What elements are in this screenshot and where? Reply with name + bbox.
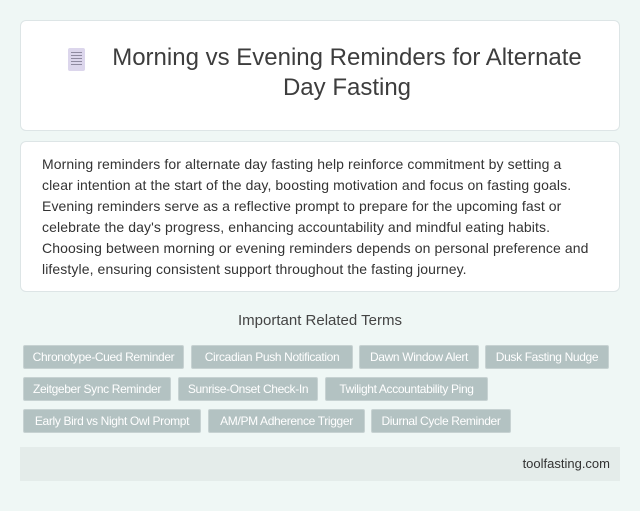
header card bbox=[20, 20, 620, 131]
description text: Choosing between morning or evening reminders depends on personal preference and bbox=[42, 240, 589, 256]
description text: Evening reminders serve as a reflective prompt to prepare for the upcoming fast or bbox=[42, 198, 561, 214]
footer text: toolfasting.com bbox=[523, 456, 610, 471]
description text: lifestyle, ensuring consistent support throughout the fasting journey. bbox=[42, 261, 467, 277]
section heading: Important Related Terms bbox=[238, 312, 402, 329]
description text: Morning reminders for alternate day fasting help reinforce commitment by setting a bbox=[42, 156, 561, 172]
icon: document bbox=[68, 48, 85, 71]
tags: Early Bird vs Night Owl Prompt bbox=[35, 414, 189, 428]
description text: clear intention at the start of the day, boosting motivation and focus on fasting goals. bbox=[42, 177, 571, 193]
tags: Circadian Push Notification bbox=[205, 350, 339, 364]
tags: Diurnal Cycle Reminder bbox=[381, 414, 500, 428]
description text bbox=[42, 156, 589, 277]
tags: AM/PM Adherence Trigger bbox=[220, 414, 353, 428]
tags: Zeitgeber Sync Reminder bbox=[33, 382, 161, 396]
tags: Chronotype-Cued Reminder bbox=[33, 350, 174, 364]
tags: Twilight Accountability Ping bbox=[339, 382, 474, 396]
title: Morning vs Evening Reminders for Alternate Day Fasting bbox=[112, 44, 582, 101]
description text: celebrate the day's progress, enhancing accountability and mindful eating habits. bbox=[42, 219, 550, 235]
tags: Dawn Window Alert bbox=[370, 350, 468, 364]
footer bbox=[20, 447, 620, 481]
tags: Sunrise-Onset Check-In bbox=[188, 382, 308, 396]
description card bbox=[20, 141, 620, 292]
tags: Dusk Fasting Nudge bbox=[496, 350, 598, 364]
